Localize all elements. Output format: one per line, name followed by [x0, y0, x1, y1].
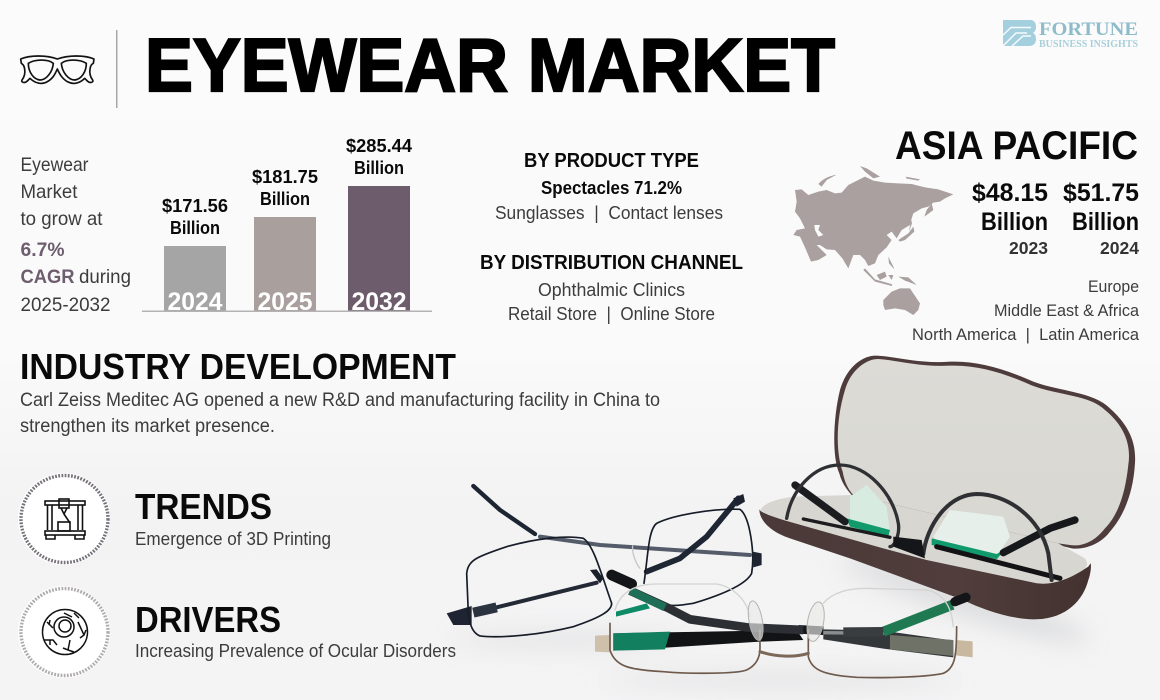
title: EYEWEAR MARKET — [145, 23, 835, 107]
heading: industry development: INDUSTRY DEVELOPMENT — [20, 346, 456, 387]
map: Asia Pacific — [793, 166, 953, 315]
regional value 2024 — [1063, 179, 1139, 258]
industry development text: strengthen its market presence. — [20, 416, 275, 437]
regional value 2023 — [972, 179, 1048, 258]
title divider — [116, 30, 118, 108]
segmentation: distribution channel: Retail Store | Online Store — [508, 304, 715, 324]
heading: Asia Pacific: ASIA PACIFIC — [895, 124, 1138, 168]
CAGR text block: during — [79, 266, 131, 288]
regional value 2024: 2024 — [1100, 238, 1139, 258]
segmentation: product type: Spectacles 71.2% — [541, 178, 682, 198]
bar 2032 — [346, 136, 412, 316]
bar 2032: 2032 — [352, 288, 406, 316]
segmentation: distribution channel: BY DISTRIBUTION CHANNEL — [480, 252, 743, 274]
icon: 3D printer in dotted circle — [18, 473, 110, 565]
icon: eyeglasses — [21, 56, 94, 83]
glasses case — [761, 356, 1135, 584]
regional value 2024: $51.75 — [1063, 179, 1139, 207]
regional value 2023: 2023 — [1009, 238, 1048, 258]
bar 2024: Billion — [170, 218, 220, 238]
segmentation: product type: Sunglasses | Contact lenses — [495, 203, 723, 223]
industry development text — [20, 390, 660, 437]
photo: eyeglasses and case — [447, 356, 1135, 686]
CAGR text block: Market — [20, 181, 78, 203]
blue wire glasses — [447, 486, 762, 637]
gold semi-rimless glasses — [595, 575, 973, 678]
other regions list — [912, 277, 1140, 344]
CAGR text block — [20, 154, 131, 316]
bar 2025: 2025 — [258, 288, 313, 316]
other regions list: North America | Latin America — [912, 325, 1140, 344]
bar 2024 — [162, 196, 228, 316]
other regions list: Middle East & Africa — [994, 301, 1140, 320]
bar 2024: 2024 — [168, 288, 223, 316]
segmentation: product type — [495, 150, 723, 223]
CAGR text block: 2025-2032 — [20, 294, 110, 316]
heading: drivers: DRIVERS — [135, 599, 281, 640]
bar 2025: Billion — [260, 189, 310, 209]
CAGR text block: CAGR — [20, 266, 74, 288]
industry development text: Carl Zeiss Meditec AG opened a new R&D and manufacturing facility in China to — [20, 390, 660, 411]
bar 2025 — [252, 167, 318, 316]
trends text: Emergence of 3D Printing — [135, 529, 331, 549]
drivers text: Increasing Prevalence of Ocular Disorders — [135, 641, 456, 661]
bar 2032: $285.44 — [346, 136, 412, 156]
segmentation: product type: BY PRODUCT TYPE — [524, 150, 699, 172]
bar 2025: $181.75 — [252, 167, 318, 187]
heading: trends: TRENDS — [135, 486, 272, 527]
icon: eye in dotted circle — [18, 586, 110, 678]
glasses inside case — [787, 465, 1075, 580]
CAGR text block: to grow at — [20, 208, 103, 230]
other regions list: Europe — [1088, 277, 1139, 296]
bar chart — [142, 136, 432, 316]
logo: Fortune Business Insights: BUSINESS INSIGHTS — [1039, 39, 1138, 50]
logo: Fortune Business Insights — [1002, 19, 1138, 50]
bar 2032: Billion — [354, 158, 404, 178]
case front shell — [759, 509, 1091, 619]
bar 2024: $171.56 — [162, 196, 228, 216]
CAGR text block: Eyewear — [20, 154, 89, 176]
CAGR text block: 6.7% — [20, 239, 64, 261]
segmentation: distribution channel — [480, 252, 743, 324]
segmentation: distribution channel: Ophthalmic Clinics — [538, 280, 685, 300]
soft shadows — [450, 545, 1094, 686]
regional value 2023: Billion — [981, 208, 1048, 236]
regional value 2024: Billion — [1072, 208, 1139, 236]
regional value 2023: $48.15 — [972, 179, 1048, 207]
logo: Fortune Business Insights: FORTUNE — [1039, 19, 1138, 40]
